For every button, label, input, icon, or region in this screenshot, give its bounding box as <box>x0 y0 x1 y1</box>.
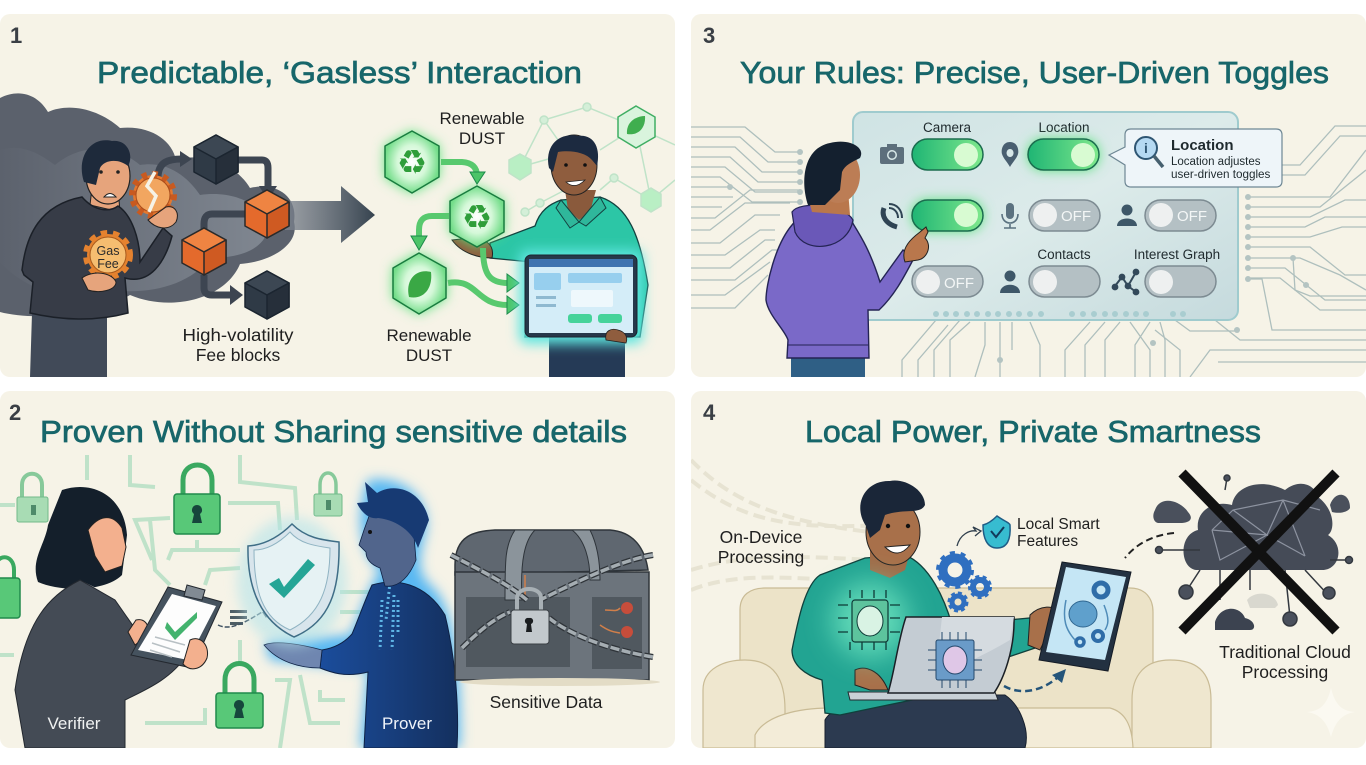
icon: recycle hexagon 2 <box>450 186 504 247</box>
icon: recycle hexagon 1 <box>385 131 439 193</box>
toggle: person off: OFF <box>1177 208 1207 225</box>
worried man with gas fee gears <box>22 140 172 377</box>
proof code and dashed arrow <box>218 610 271 627</box>
clipboard with check <box>131 585 222 669</box>
lock large top <box>174 465 220 534</box>
chains around chest <box>451 555 653 657</box>
person in purple hoodie pressing toggle <box>766 142 929 377</box>
toggle: interest graph off <box>1145 266 1216 297</box>
icon: chest chip with brain <box>832 582 908 658</box>
callout: location tooltip <box>1109 129 1282 187</box>
chest ground shadow <box>460 678 660 686</box>
callout text: Location adjustes <box>1171 156 1261 168</box>
green circuit traces <box>0 455 370 748</box>
toggle: third row off: OFF <box>944 275 974 292</box>
label: renewable dust top <box>440 112 524 144</box>
icon: interest graph <box>1113 270 1138 294</box>
verifier woman <box>15 487 187 748</box>
toggle: person off <box>1145 200 1216 231</box>
toggle: calls on <box>912 200 983 231</box>
data stream decoration <box>691 460 900 590</box>
label: renewable dust bottom <box>388 329 471 361</box>
icon: chest padlock <box>511 589 549 644</box>
lock bottom <box>216 664 263 728</box>
treasure chest with chains <box>455 530 649 680</box>
arrow from gears to shield <box>957 527 981 546</box>
tablet with brain and gears <box>1039 562 1131 671</box>
icon: recycle hexagon 1: ♻ <box>397 143 427 183</box>
circuit nodes <box>727 149 1309 363</box>
toggle row labels: Contacts <box>1037 247 1091 262</box>
toggle: microphone off: OFF <box>1061 208 1091 225</box>
label: renewable dust bottom: DUST <box>406 346 452 365</box>
toggle row labels: Location <box>1038 120 1090 135</box>
icon: gears <box>938 553 990 611</box>
icon: microphone <box>1002 203 1018 228</box>
label: traditional cloud processing: Traditional Cloud <box>1219 642 1351 662</box>
label: prover: Prover <box>382 714 432 733</box>
icon: person <box>1117 204 1137 226</box>
icon: shield with check <box>237 517 347 647</box>
label: renewable dust bottom: Renewable <box>386 326 472 345</box>
icon: network leaf hexagon <box>618 106 655 148</box>
icon: recycle hexagon 2: ♻ <box>462 198 492 238</box>
label: on-device processing: On-Device <box>720 527 802 547</box>
lock small top right <box>314 473 342 516</box>
step number 4: 4 <box>703 400 716 425</box>
lock small top left <box>17 474 48 522</box>
step number 2: 2 <box>9 400 21 425</box>
seated person with laptop <box>792 481 1058 748</box>
label: renewable dust top: Renewable <box>439 109 525 128</box>
icon: contact person <box>1000 270 1020 293</box>
icon: phone <box>883 204 902 227</box>
toggle row labels: Interest Graph <box>1134 247 1220 262</box>
label: renewable dust top: DUST <box>459 129 505 148</box>
icon: leaf hexagon <box>393 253 446 314</box>
laptop <box>848 617 1014 700</box>
toggle: third row off <box>912 266 983 297</box>
heading: local power: Local Power, Private Smartness <box>805 414 1261 449</box>
sparkle watermark <box>1307 688 1355 737</box>
arrow heads on fee flow <box>180 151 277 305</box>
lock left edge <box>0 557 20 618</box>
label: verifier: Verifier <box>48 714 101 733</box>
label: traditional cloud processing <box>1219 642 1351 682</box>
green arrow heads <box>411 172 519 314</box>
icon: gas fee gear: Fee <box>97 257 119 271</box>
heading: proven without sharing: Proven Without Sharing sensitive details <box>40 414 627 449</box>
toggle: location on <box>1028 139 1099 170</box>
callout text: Location <box>1171 137 1234 154</box>
prover glow <box>265 479 460 748</box>
label: local smart features <box>1017 516 1100 550</box>
heading: your rules: Your Rules: Precise, User-Driven Toggles <box>740 55 1329 90</box>
icon: shield <box>983 516 1010 548</box>
callout text: user-driven toggles <box>1171 168 1271 181</box>
icon: location pin <box>1002 142 1018 167</box>
panel: 3 user-driven toggles <box>691 14 1366 377</box>
step number 3: 3 <box>703 23 715 48</box>
block: dark fee block bottom <box>245 271 289 319</box>
toggle: camera on <box>912 139 983 170</box>
flow arrows between fee blocks <box>158 159 268 295</box>
icon: gas fee gear: Gas <box>97 244 119 258</box>
label: high-volatility fee blocks <box>184 328 294 361</box>
block: orange fee block lower <box>182 228 226 275</box>
label: on-device processing: Processing <box>718 547 804 567</box>
heading: predictable gasless interaction: Predictable, ‘Gasless’ Interaction <box>97 55 582 90</box>
panel: 4 local power private smartness <box>691 391 1366 748</box>
prover man <box>264 482 458 748</box>
big transition arrow <box>285 186 375 243</box>
label: high-volatility fee blocks: High-volatility <box>182 325 294 345</box>
toggle row labels: Camera <box>923 120 971 135</box>
dashed link tablet to cloud <box>1125 533 1174 558</box>
block: dark fee block top <box>194 135 238 184</box>
callout text <box>1171 137 1271 181</box>
label: sensitive data: Sensitive Data <box>490 692 603 712</box>
network backdrop <box>509 103 675 216</box>
panel: 1 predictable gasless interaction <box>0 14 675 377</box>
storm cloud background <box>0 93 295 316</box>
panel: 2 proven without sharing <box>0 391 675 748</box>
toggle glow <box>912 139 1099 231</box>
man holding tablet <box>452 135 648 377</box>
icon: magnifier info: i <box>1144 140 1148 156</box>
label: high-volatility fee blocks: Fee blocks <box>196 345 281 365</box>
label: on-device processing <box>718 527 804 567</box>
toggle: microphone off <box>1029 200 1100 231</box>
circuit traces <box>691 126 1366 377</box>
button dots along panel edge <box>933 311 1186 317</box>
toggle: contacts off <box>1029 266 1100 297</box>
tablet with interface <box>519 250 643 344</box>
hexagon glow <box>385 131 504 314</box>
icon: camera <box>880 144 904 164</box>
step number 1: 1 <box>10 23 22 48</box>
sofa <box>703 588 1211 748</box>
toggle row labels <box>923 120 1220 262</box>
block: orange fee block upper <box>245 190 289 238</box>
label: traditional cloud processing: Processing <box>1242 662 1328 682</box>
icon: broken gear <box>133 172 177 228</box>
icon: gas fee gear <box>82 234 129 292</box>
dashed arrow laptop to tablet <box>1004 669 1066 691</box>
green flow arrows <box>419 162 508 305</box>
glass settings panel <box>853 112 1238 320</box>
icon: magnifier info <box>1135 137 1163 167</box>
big black x over cloud <box>1182 473 1336 631</box>
label: local smart features: Local Smart <box>1017 516 1100 533</box>
label: local smart features: Features <box>1017 533 1078 550</box>
traditional cloud network <box>1153 475 1352 630</box>
